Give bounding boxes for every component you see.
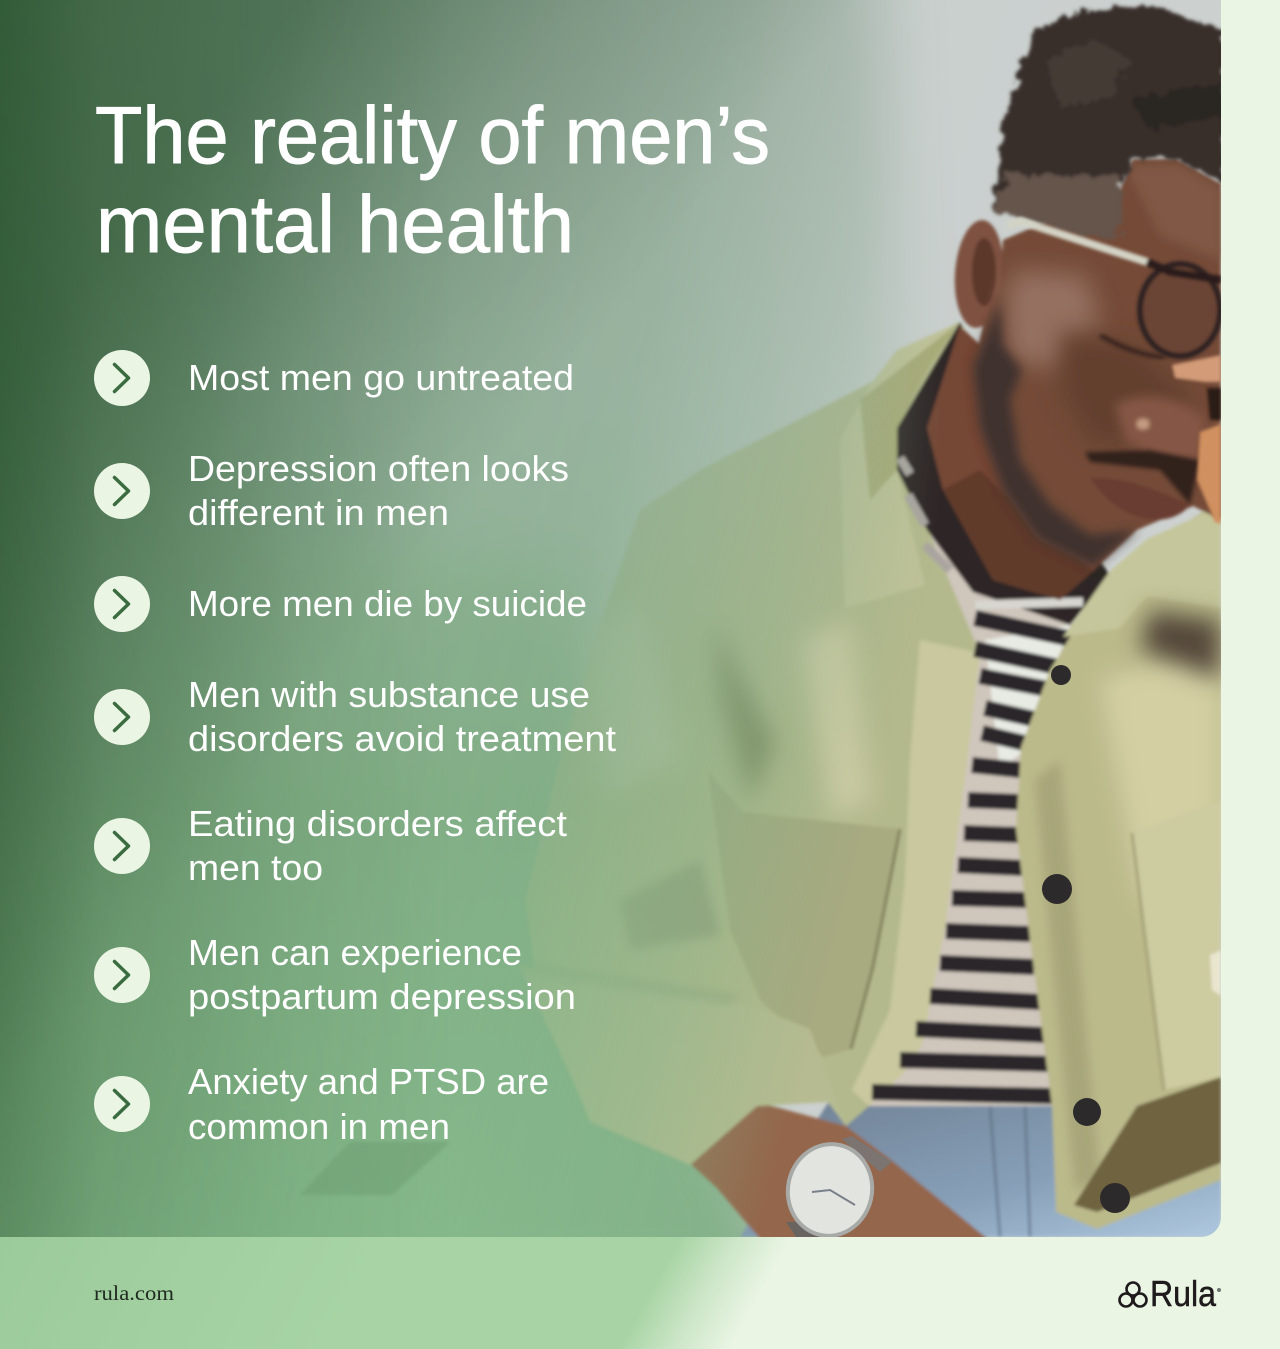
item: postpartum depression [94, 932, 576, 1017]
right collar [1063, 506, 1221, 637]
item: most men go untreated [94, 350, 574, 406]
title: mental health [96, 180, 574, 270]
table edge [0, 1106, 550, 1110]
beard [973, 300, 1137, 567]
item: substance use [94, 674, 616, 759]
buttons [1042, 665, 1130, 1213]
item: suicide [94, 576, 587, 632]
striped shirt [869, 534, 1072, 1108]
jacket hem inner shadow [1074, 1077, 1221, 1212]
inner collar dark band [897, 322, 1110, 625]
phone on the table [300, 1142, 450, 1195]
list of realities [94, 350, 616, 1147]
collar stripes [900, 458, 950, 570]
footer url: rula.com [94, 1281, 174, 1305]
item: postpartum depression: Men can experience [188, 932, 522, 973]
jeans [740, 1100, 1221, 1237]
item: anxiety and PTSD: Anxiety and PTSD are [188, 1061, 549, 1102]
item: substance use: disorders avoid treatment [188, 718, 616, 759]
item: eating disorders [94, 803, 567, 888]
hair [993, 4, 1225, 240]
left collar [840, 322, 960, 608]
glasses [1007, 221, 1221, 356]
jacket right panel [1016, 500, 1221, 1229]
item: eating disorders: men too [188, 847, 323, 888]
item: anxiety and PTSD: common in men [188, 1106, 450, 1147]
item: depression looks different: Depression often looks [188, 448, 569, 489]
item: postpartum depression: postpartum depression [188, 976, 576, 1017]
item: anxiety and PTSD [94, 1061, 549, 1147]
item: depression looks different: different in men [188, 492, 449, 533]
Rula logo: Rula [1150, 1273, 1217, 1314]
title [95, 91, 770, 270]
neck [925, 326, 1134, 572]
footer band [0, 1237, 1280, 1349]
item: most men go untreated: Most men go untreated [188, 357, 574, 398]
upper arm fold shadow [713, 646, 780, 791]
title: The reality of men’s [95, 91, 770, 181]
jacket left panel and sleeve [525, 325, 980, 1165]
face [973, 159, 1221, 567]
hand [1172, 355, 1221, 524]
jacket placket highlight [852, 640, 980, 1106]
eye [1100, 335, 1165, 358]
ear [951, 218, 1007, 330]
icon: trefoil mark [1120, 1282, 1146, 1306]
item: suicide: More men die by suicide [188, 583, 587, 624]
Rula logo [1120, 1273, 1221, 1314]
mustache and lips [1085, 450, 1200, 505]
item: depression looks different [94, 448, 569, 533]
wristwatch [779, 1136, 892, 1244]
cuff [526, 973, 817, 1050]
table surface and lower wall tint [328, 598, 760, 1237]
item: eating disorders: Eating disorders affect [188, 803, 567, 844]
chest pocket [716, 789, 898, 1056]
forearm [681, 1102, 989, 1240]
item: substance use: Men with substance use [188, 674, 590, 715]
